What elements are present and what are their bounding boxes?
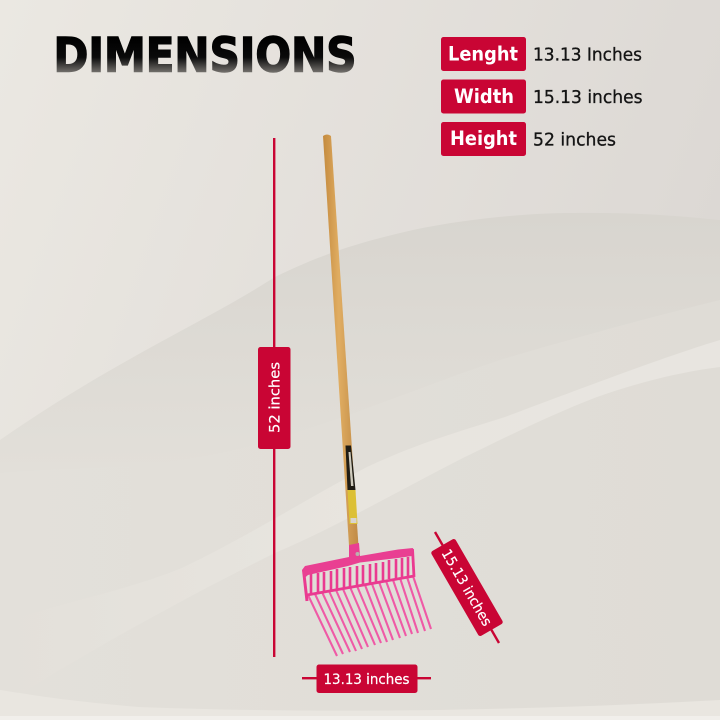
fork basket	[304, 549, 414, 601]
spec: length: Lenght	[448, 42, 518, 66]
spec: length	[441, 37, 642, 71]
spec: width: Width	[454, 85, 514, 108]
width dimension line	[430, 532, 504, 643]
handle label	[346, 446, 358, 524]
pitchfork	[302, 134, 431, 656]
handle	[323, 134, 358, 546]
length dimension line	[302, 664, 431, 693]
fork tines	[308, 576, 431, 656]
spec: height	[441, 122, 616, 156]
spec: width	[441, 80, 642, 114]
length dimension line: 13.13 inches	[324, 672, 410, 688]
title: DIMENSIONS	[54, 28, 356, 84]
spec: height: Height	[450, 127, 517, 150]
spec: width: 15.13 inches	[533, 87, 642, 108]
height dimension line	[258, 138, 290, 657]
bolt	[356, 552, 360, 556]
height dimension line: 52 inches	[268, 362, 284, 433]
width dimension line: 15.13 inches	[438, 547, 495, 629]
spec: height: 52 inches	[533, 130, 616, 150]
fork head	[302, 543, 413, 578]
spec: length: 13.13 Inches	[533, 44, 642, 66]
